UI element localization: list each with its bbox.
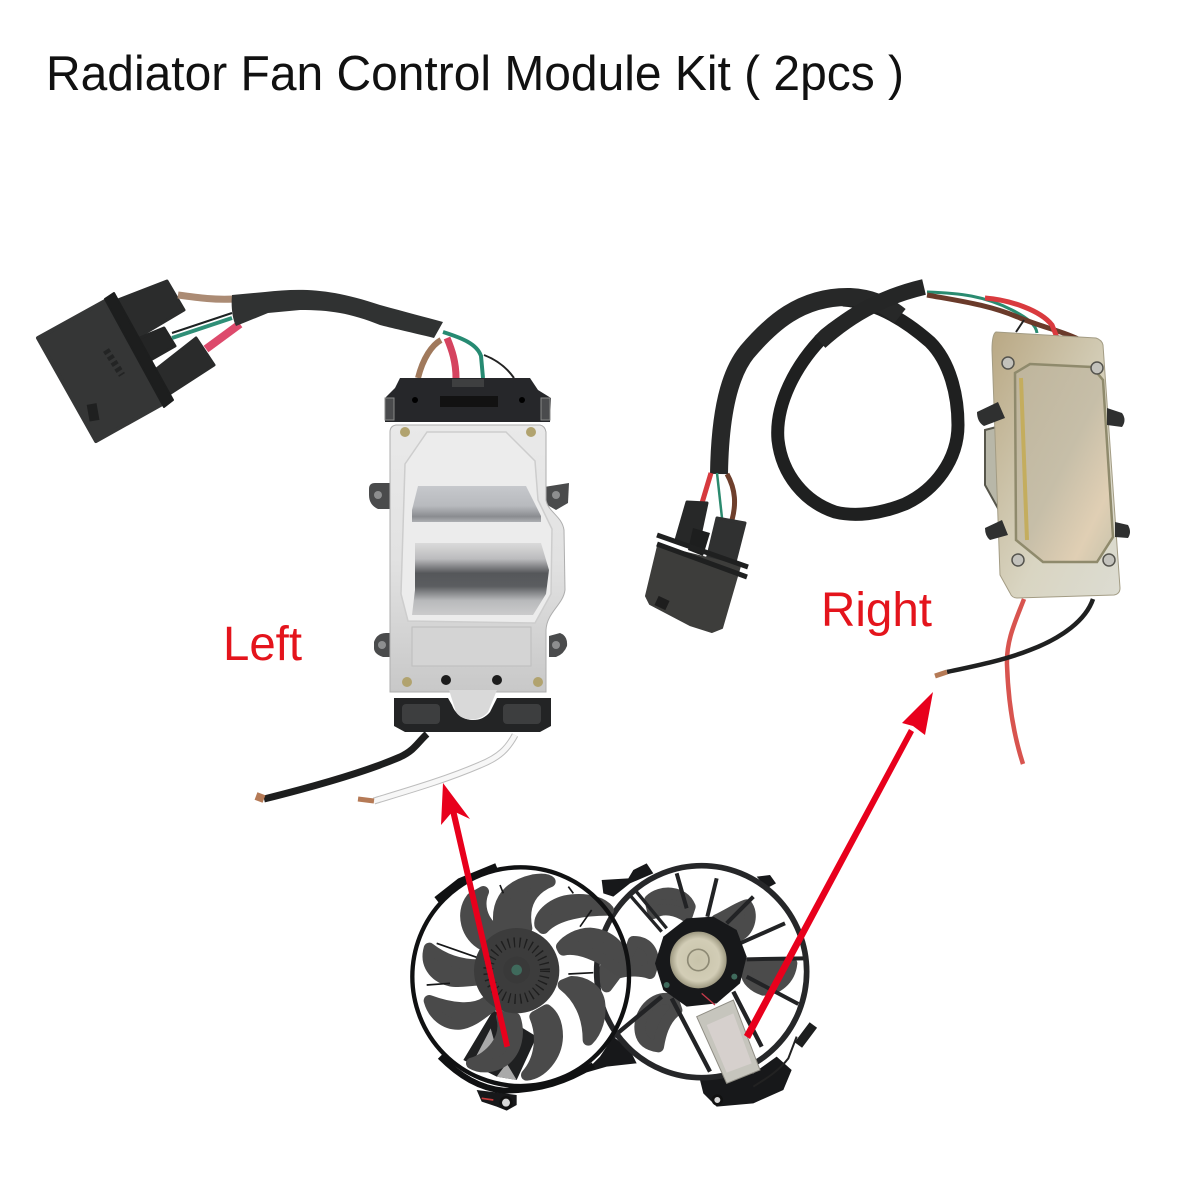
right module assembly: [646, 287, 1130, 764]
left module screws and holes: [400, 427, 543, 687]
left module assembly: [38, 281, 569, 801]
right fan spokes: [613, 873, 803, 1072]
right harness connector wires: [702, 473, 735, 520]
right harness sleeve: [719, 297, 900, 474]
right fan shroud ring: [597, 866, 807, 1078]
right fan motor: [655, 917, 747, 1007]
right module black wire: [935, 599, 1093, 676]
right module red wire: [1007, 599, 1024, 764]
right module side bracket: [985, 424, 1012, 515]
right module mounting ears: [977, 402, 1130, 540]
left harness sleeve: [232, 290, 443, 338]
lower left fan mount: [482, 1097, 511, 1108]
left module lower shine band: [412, 543, 549, 615]
left module ear holes: [374, 491, 560, 649]
right module raised cover: [1015, 364, 1113, 562]
left label: Left: [223, 618, 302, 671]
right harness loop: [778, 300, 958, 514]
left fan silver module: [475, 1028, 517, 1080]
left module white wire: [358, 735, 515, 801]
left fan shroud ring: [412, 867, 629, 1091]
left fan spokes: [427, 885, 593, 985]
right module base plate: [992, 332, 1120, 598]
left fan lower module: [463, 1010, 537, 1080]
arrow: left fan to left module: [441, 783, 510, 1048]
left fan blades: [428, 879, 625, 1075]
dual radiator fan unit: [412, 863, 813, 1111]
right fan blades: [604, 893, 792, 1047]
left harness connector: [38, 281, 214, 441]
left module metal plate: [390, 425, 565, 692]
right module cover edge highlight: [1021, 378, 1027, 540]
right label: Right: [821, 584, 932, 637]
left module bottom connectors: [394, 690, 551, 732]
left module upper shine band: [412, 486, 541, 522]
left module top connector: [385, 378, 551, 422]
left connector wires: [172, 295, 240, 349]
arrow: right fan to right module: [744, 692, 933, 1039]
fan frame bridge: [477, 863, 792, 1111]
left module black wire: [256, 734, 427, 799]
title: Radiator Fan Control Module Kit ( 2pcs ): [46, 46, 904, 101]
lower right fan mount: [713, 1096, 722, 1104]
left module mounting ears: [369, 483, 569, 657]
left fan hub: [474, 928, 559, 1013]
left module raised cover: [401, 432, 552, 623]
right harness connector: [646, 502, 748, 632]
right cable wires to module: [927, 292, 1080, 340]
left module label rectangle: [412, 627, 531, 666]
fan module mounted: [697, 1000, 760, 1083]
fan side connector wiring: [753, 1025, 813, 1087]
right harness sleeve end: [820, 287, 924, 342]
left module wires to connector: [418, 332, 514, 378]
right module screws: [1002, 357, 1115, 566]
